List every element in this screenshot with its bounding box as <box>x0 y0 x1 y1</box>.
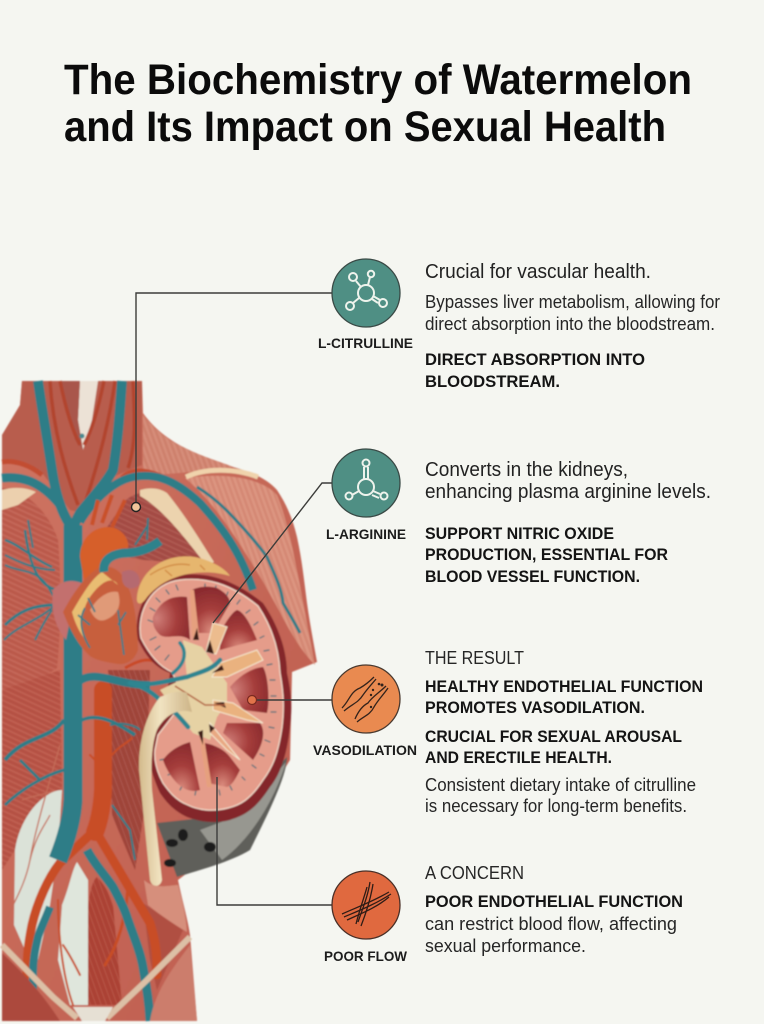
text block: the result: HEALTHY ENDOTHELIAL FUNCTION <box>425 678 703 696</box>
text block: L-citrulline: DIRECT ABSORPTION INTO <box>425 351 645 369</box>
kidney capsule <box>137 574 291 822</box>
icon: vasodilation vessels <box>332 665 400 733</box>
text block: L-citrulline: direct absorption into the bloodstream. <box>425 314 715 334</box>
vessels below heart <box>78 677 150 685</box>
text block: L-arginine: PRODUCTION, ESSENTIAL FOR <box>425 546 668 564</box>
pelvic band <box>2 937 190 1018</box>
text block: L-citrulline: BLOODSTREAM. <box>425 373 560 391</box>
text block: L-arginine: SUPPORT NITRIC OXIDE <box>425 525 614 543</box>
adrenal cap <box>137 556 230 603</box>
lower left muscles <box>2 670 62 870</box>
ureter <box>139 692 192 886</box>
bone pelvis <box>157 757 287 877</box>
text block: L-citrulline: Crucial for vascular health. <box>425 261 651 283</box>
heart <box>52 495 160 664</box>
kidney teal vessels <box>130 643 220 727</box>
text block: L-arginine: BLOOD VESSEL FUNCTION. <box>425 568 640 586</box>
renal sinus <box>160 640 227 740</box>
cortex stripes <box>148 584 276 795</box>
text block: a concern <box>425 863 683 956</box>
icon: L-citrulline molecule <box>332 259 400 327</box>
text block: the result: CRUCIAL FOR SEXUAL AROUSAL <box>425 728 682 746</box>
title: The Biochemistry of Watermelon <box>64 56 692 104</box>
text block: a concern: can restrict blood flow, affecting <box>425 914 677 934</box>
right chest muscle <box>105 493 212 565</box>
kidney cortex <box>140 579 283 810</box>
left chest muscle <box>2 488 60 695</box>
text block: L-arginine <box>425 459 711 586</box>
text block: the result: THE RESULT <box>425 648 524 668</box>
shoulder muscle highlight <box>185 476 315 665</box>
collar tendon <box>186 470 258 477</box>
icon: poor flow vessels <box>332 871 400 939</box>
torso silhouette <box>2 381 317 1021</box>
text block: L-arginine: Converts in the kidneys, <box>425 459 628 481</box>
text block: L-citrulline: Bypasses liver metabolism, allowing for <box>425 292 720 312</box>
text block: the result: Consistent dietary intake of citrulline <box>425 775 696 795</box>
label: L-arginine: L-ARGININE <box>326 526 406 542</box>
connector: vasodilation <box>248 696 332 704</box>
text block: the result: PROMOTES VASODILATION. <box>425 699 645 717</box>
connector: poor flow <box>217 777 332 905</box>
text block: a concern: sexual performance. <box>425 936 586 956</box>
text block: the result <box>425 648 703 816</box>
pale connective tissue <box>14 790 62 960</box>
calyces <box>190 590 199 642</box>
text block: the result: AND ERECTILE HEALTH. <box>425 749 612 767</box>
text block: a concern: POOR ENDOTHELIAL FUNCTION <box>425 893 683 911</box>
title <box>64 56 692 151</box>
text block: the result: is necessary for long-term benefits. <box>425 796 687 816</box>
text block: a concern: A CONCERN <box>425 863 524 883</box>
title: and Its Impact on Sexual Health <box>64 103 666 151</box>
label: vasodilation: VASODILATION <box>313 742 417 758</box>
text block: L-citrulline <box>425 261 720 391</box>
connector: L-arginine <box>213 483 332 623</box>
red artery trunk and fork <box>27 690 157 1005</box>
teal trunk and branches <box>2 381 300 1021</box>
neck muscles <box>2 381 142 515</box>
label: L-citrulline: L-CITRULLINE <box>318 335 413 351</box>
kidney <box>130 556 291 886</box>
connector: L-citrulline <box>132 293 332 512</box>
text block: L-arginine: enhancing plasma arginine levels. <box>425 481 711 503</box>
anatomical illustration: torso with heart and kidney <box>2 381 317 1021</box>
pyramids <box>153 597 190 640</box>
icon: L-arginine molecule <box>332 449 400 517</box>
groin tissue <box>144 880 187 932</box>
label: poor flow: POOR FLOW <box>324 948 408 964</box>
